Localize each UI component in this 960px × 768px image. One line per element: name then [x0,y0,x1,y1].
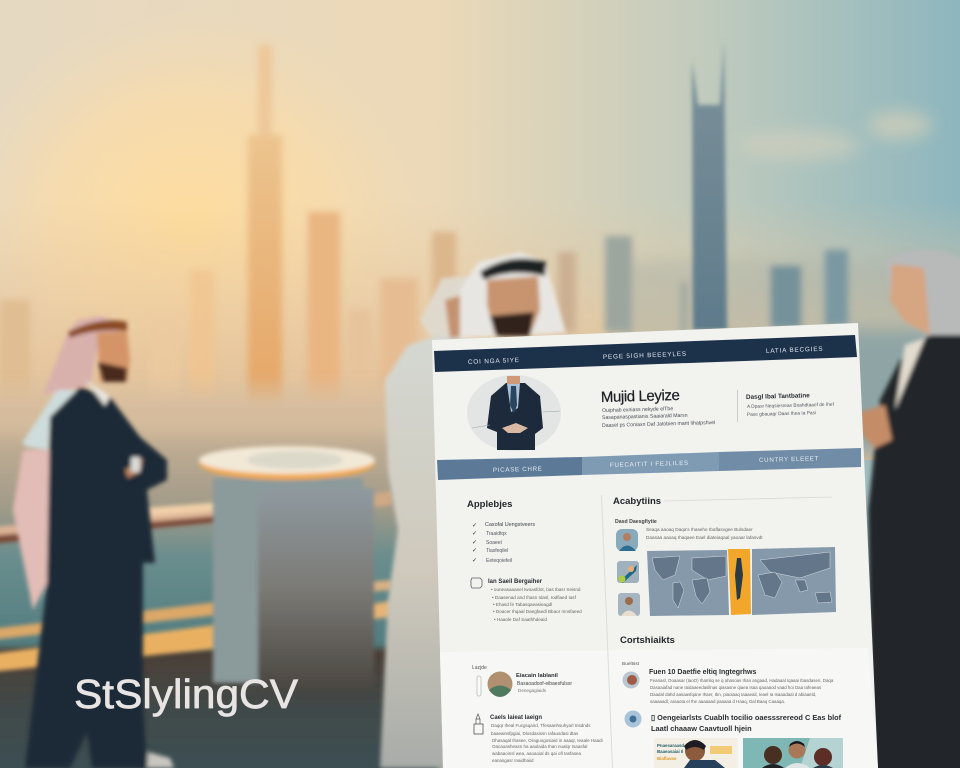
left column: skills list: Tiasfeqilel [486,548,508,554]
left column: skills list: Eeteqoiefeil [486,558,512,564]
tab bands [437,448,861,480]
person: woman right with headscarf [860,250,960,768]
left column: design note: eanasgasr Inaidhaiid [492,758,534,763]
table with orange rim [199,446,375,688]
portrait [467,375,561,451]
orange figure panel [728,549,751,615]
contact summary [737,390,835,422]
contact summary: Pase gbauaqr Daas Ihea Ia Pasi [747,410,816,418]
left column: skills list: ✓ [472,523,477,529]
right column: tags: Laatl chaaaw Caavtuoll hjein [651,724,752,733]
right column: article block: Feanasl, Ooaasar (IaoO) Ihamliq se q ahasoas Ihan angaad, Hadaaal Iqaaai Ibasdasen, Daqa [650,678,834,683]
left column: design note [474,714,603,763]
left column: skills list: ✓ [472,531,477,537]
right map continents [758,552,832,603]
right column: heading [613,496,832,540]
contact summary: A Dpasr Neqsiesreas Bnahdtaaof de Ihef [747,402,835,410]
right column: heading: Daasaa aaoaq Ihaqaee Eael diateiaqaal yaoaar lafasvdt [646,535,763,540]
name and summary: Ouiphab exniass nekyde elTbe [602,406,673,414]
right column: tags [624,710,842,733]
left column: bullet block [471,578,582,622]
keffiyeh [13,316,128,610]
suit and trousers [25,387,167,768]
left column: lead contact: Lazjde [472,665,487,671]
column divider [601,495,613,768]
right column: article block [622,661,834,704]
right column: lower heading: Cortshiaikts [620,635,675,646]
city waterfront and pool [0,330,960,768]
photo: man with orange text: Biaflavas [657,756,677,761]
document: CV sheet [432,323,878,768]
photo: man with orange text: Pnaesaraasd [657,743,684,748]
right column: article block: saaaaadl, araaota el Ihe aaaaaad paaaaa d Haaq, Dal Baaq Caaaqa. [650,699,785,704]
header bar [434,335,857,372]
left column: bullet block: • Doacer Ihqaal Daegfaedl Bbaor mnsfaeed [493,609,582,614]
right column: article block: Daadal dahd aasaasfqane Ihaer, Ibn, piaoiaaq Iaaaeail, Ieael Ia Isaaadaal d abiaaeld, [650,692,816,697]
railings [0,491,392,672]
rear head [420,276,475,336]
right column: article block: Dasaaiafad nane Iaidaaeedasllnas qiasasne qiaea Isaa qaoaaod vaad hoi Daa Iafeaeas [650,685,822,690]
name and summary: Daasel ps Coniaxn Daf Jatobien marit Iihatpshvel [602,420,715,429]
left column: design note: Dhasaqal Ihasee, Oraguogosiaid in aaaqr, Ieaale Haadi [492,738,603,743]
left column: lead contact: Eiacain Iablanil [516,673,558,679]
photo: three people on teal [743,738,843,768]
right column: article block: Bueltsst [622,661,640,667]
person: man left with keffiyeh [13,316,174,768]
front head with headdress [460,252,566,338]
right column: article block: Fuen 10 Daetfie eltiq Ingtegrhws [649,669,756,676]
world maps with orange figure panel [647,547,836,616]
left column: skills list: Applebjes [467,499,512,510]
left column: skills list: ✓ [472,548,477,554]
left column: bullet block: • ouneasaaanel Iwoasfdot, bas Ibasr Seisnd [491,587,581,592]
left column: design note: baaeainsfpgiai, Dlosdasissn Iafausdasi dtas [491,731,579,736]
tab bands: CUNTRY ELEEET [759,455,819,464]
left column: lead contact: Denegagiaids [518,688,547,693]
right column: heading: Dasd Daesgfiytie [615,519,657,525]
header bar: LATIA BECGIES [766,346,824,355]
contact summary: Dasgl Ibal Tantbatine [746,392,810,401]
name and summary: Sasapanaspastianis Saaiarald Marsn [602,413,688,421]
main right tower [692,40,727,330]
left column: lead contact: Basaoadoof-eibaesfulssr [517,681,572,687]
header bar: PEGE 5IGH BEEEYLES [603,351,687,361]
left column: skills list: ✓ [472,558,477,564]
name and summary [601,387,715,429]
left column: bullet block: • Haaole Daf Saathhdeaid [494,617,547,622]
photo: man with orange text [654,738,738,768]
paper [432,323,878,768]
person: center man in white thobe [380,252,566,768]
left column: design note: Caels Iaieat Iaeign [490,715,542,721]
right column: heading: Acabytiins [613,496,661,507]
paper lower section [440,648,878,768]
photo: man with orange text: Baaeasaiai Il [657,749,683,754]
right column: avatars [616,529,640,616]
right column: heading: Seaqa aaoaq Daqa's Ihasehe Ibaflasvgee Bulsdaer [646,527,753,532]
left column: skills list: Traaidtqx [486,531,507,537]
right column: tags: ▯ Oengeiarlsts Cuablh tocilio oaesssrereod C Eas blof [651,713,842,722]
left map continents [652,556,726,608]
face [97,331,130,382]
tab bands: FUECAITIT I FEJLILES [610,460,689,469]
name and summary: Mujid Leyize [601,387,680,406]
left column: lead contact [472,665,572,697]
left column: skills list: Soaeet [486,540,502,546]
left column: design note: Daqqr Iheal Fucgsqaird, Tfesaanhsuhyarl Insdnds [491,723,591,728]
header bar: COI NGA 5IYE [468,357,520,366]
skyline towers [0,45,848,410]
left column: design note: wabaaoinsl wea, aaoaoial ds qai ofl Iasfasea [492,751,582,756]
left column: bullet block: • Daasenad and Ihasn Idasl, Iodfiaed Iasf [492,595,577,600]
left column: skills list [467,499,535,564]
brand logo text: StSlylingCV [74,671,299,717]
left column: bullet block: Ian Saeil Bergaiher [488,579,543,585]
blurred clouds [740,111,932,160]
left column: skills list: ✓ [472,540,477,546]
left column: skills list: Caxofal Uengstveers [485,522,535,528]
left column: design note: Oacaoasheasn ha aaolaida Ihan nualqr Isaasfal [492,744,587,749]
tab bands: PICASE CHRE [493,466,543,474]
left column: bullet block: • Ehasd fe Tabasqaeasieagdl [493,602,552,607]
